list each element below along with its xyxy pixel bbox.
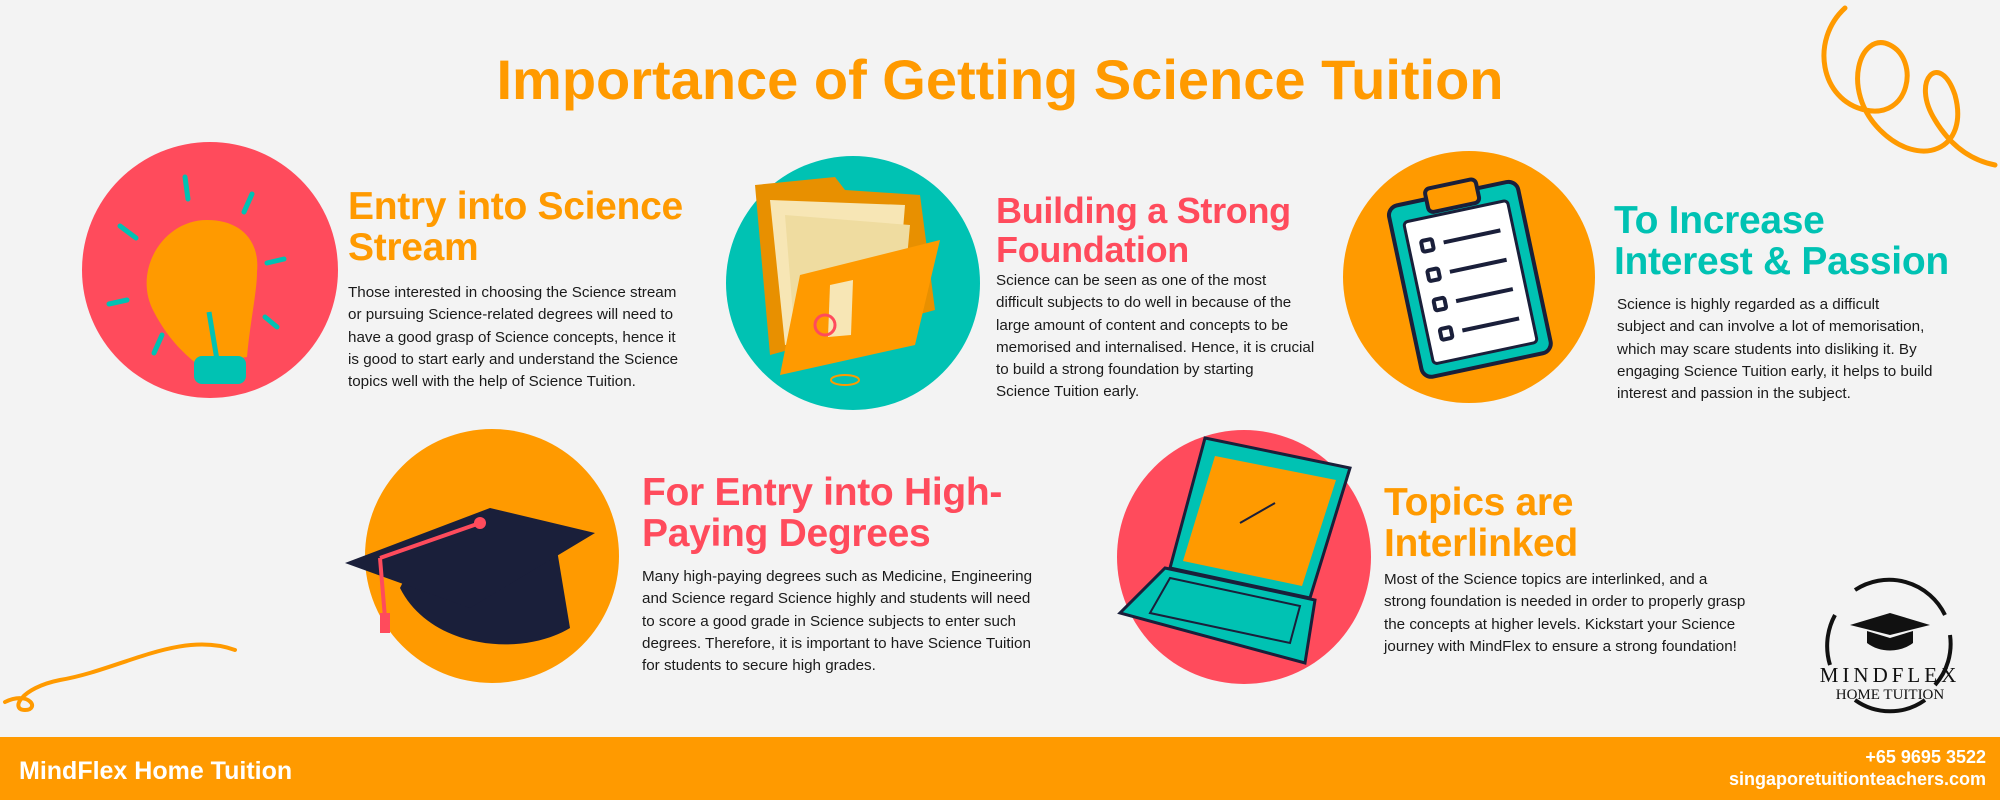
footer contact: +65 9695 3522 [1865, 747, 1986, 767]
logo: mindflex [1820, 578, 1960, 714]
heading: Paying Degrees [642, 512, 930, 555]
body text: have a good grasp of Science concepts, hence it [348, 329, 676, 346]
heading: Stream [348, 226, 478, 269]
heading: Foundation [996, 229, 1189, 270]
heading: To Increase [1614, 199, 1825, 242]
icon: folder [726, 156, 980, 410]
heading [1614, 199, 1949, 283]
title: Importance of Getting Science Tuition [496, 48, 1504, 111]
body text [642, 568, 1032, 674]
logo: mindflex: MINDFLEX [1820, 663, 1960, 687]
heading: Interest & Passion [1614, 240, 1949, 283]
body text [1384, 571, 1745, 655]
body text: or pursuing Science-related degrees will need to [348, 306, 673, 323]
body text: the concepts at higher levels. Kickstart your Science [1384, 616, 1735, 633]
footer bar [0, 737, 2000, 800]
body text: Science can be seen as one of the most [996, 272, 1266, 289]
panel: increase interest and passion [1343, 151, 1949, 403]
body text: and Science regard Science highly and students will need [642, 590, 1030, 607]
heading: Topics are [1384, 481, 1573, 524]
logo: mindflex: HOME TUITION [1836, 687, 1944, 703]
body text [1617, 296, 1932, 402]
icon: laptop [1117, 430, 1371, 684]
body text: memorised and internalised. Hence, it is crucial [996, 339, 1314, 356]
body text: large amount of content and concepts to be [996, 317, 1288, 334]
body text: which may scare students into disliking it. By [1617, 341, 1917, 358]
body text: journey with MindFlex to ensure a strong foundation! [1384, 638, 1737, 655]
body text: topics well with the help of Science Tuition. [348, 373, 636, 390]
panel: entry into science stream [82, 142, 683, 398]
icon: graduation cap [345, 429, 619, 683]
heading: Entry into Science [348, 185, 683, 228]
body text: Those interested in choosing the Science stream [348, 284, 676, 301]
body text: Many high-paying degrees such as Medicine, Engineering [642, 568, 1032, 585]
body text: to score a good grade in Science subjects to enter such [642, 613, 1016, 630]
body text: to build a strong foundation by starting [996, 361, 1254, 378]
body text: subject and can involve a lot of memorisation, [1617, 318, 1924, 335]
body text: Science is highly regarded as a difficult [1617, 296, 1879, 313]
body text: for students to secure high grades. [642, 657, 876, 674]
footer brand: MindFlex Home Tuition [19, 757, 292, 785]
heading: Interlinked [1384, 522, 1578, 565]
panel: building a strong foundation [726, 156, 1314, 410]
heading [348, 185, 683, 269]
body text: engaging Science Tuition early, it helps to build [1617, 363, 1932, 380]
heading [1384, 481, 1578, 565]
body text: interest and passion in the subject. [1617, 385, 1851, 402]
body text: is good to start early and understand the Science [348, 351, 678, 368]
decoration: swirl top right [1821, 6, 1998, 168]
panel: high-paying degrees [345, 429, 1032, 683]
body text: Most of the Science topics are interlinked, and a [1384, 571, 1707, 588]
body text: strong foundation is needed in order to properly grasp [1384, 593, 1745, 610]
footer contact [1729, 747, 1986, 789]
panel: topics are interlinked [1117, 430, 1745, 684]
heading [996, 190, 1291, 270]
icon: clipboard [1343, 151, 1595, 403]
footer contact: singaporetuitionteachers.com [1729, 769, 1986, 789]
body text [348, 284, 678, 390]
heading [642, 471, 1002, 555]
heading: For Entry into High- [642, 471, 1002, 514]
heading: Building a Strong [996, 190, 1291, 231]
body text [996, 272, 1314, 400]
body text: difficult subjects to do well in because of the [996, 294, 1291, 311]
body text: Science Tuition early. [996, 383, 1139, 400]
decoration: squiggle bottom left [2, 642, 238, 712]
body text: degrees. Therefore, it is important to have Science Tuition [642, 635, 1031, 652]
icon: light bulb [82, 142, 338, 398]
